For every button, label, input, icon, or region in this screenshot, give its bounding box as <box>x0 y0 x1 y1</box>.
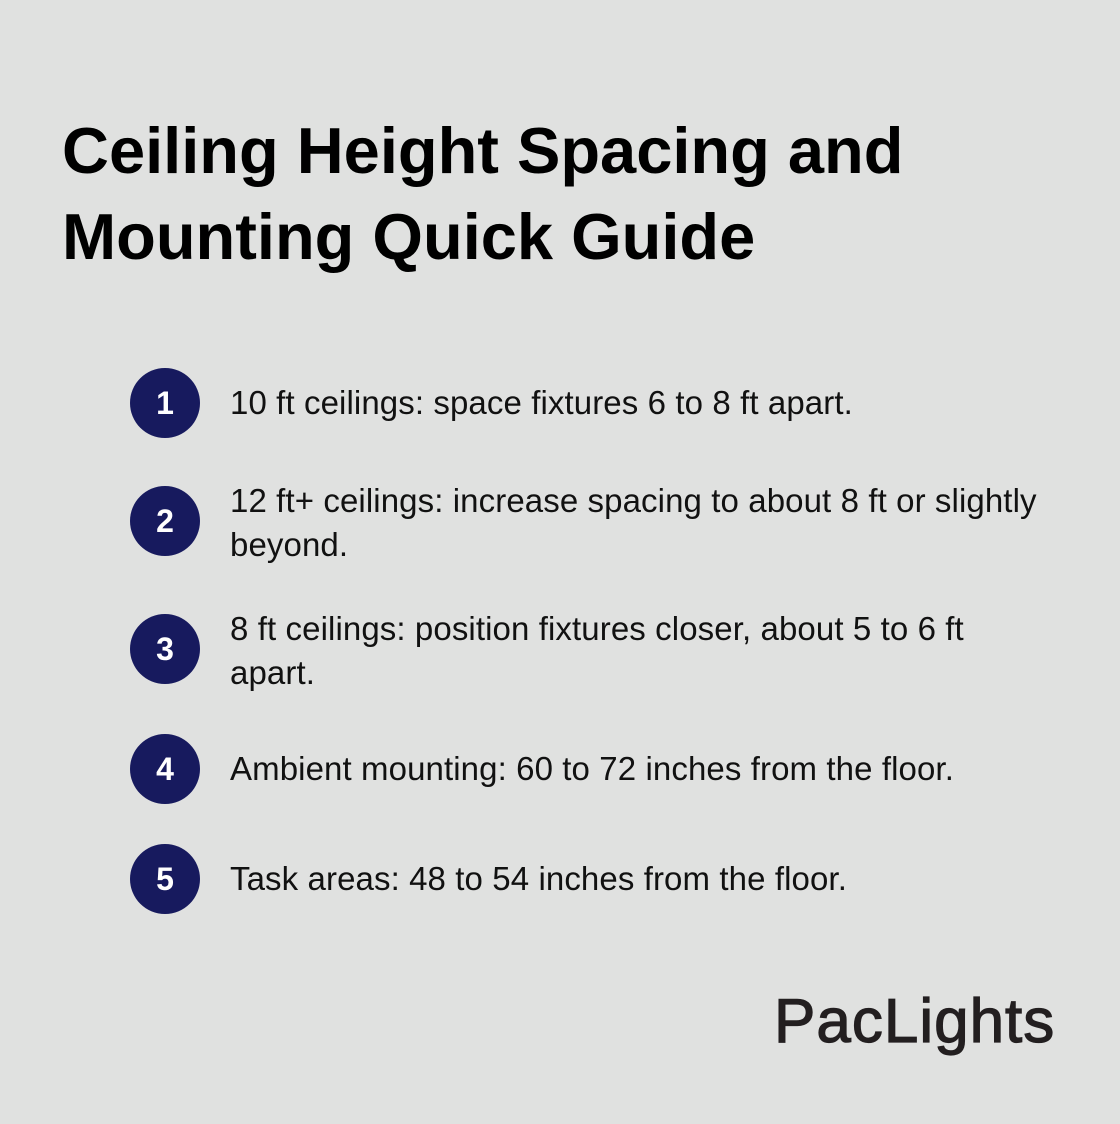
item 3: apart. <box>230 654 315 691</box>
item 2: 2 <box>156 503 174 539</box>
item 2: 12 ft+ ceilings: increase spacing to about 8 ft or slightly beyond. <box>230 482 1037 563</box>
item 1: 10 ft ceilings: space fixtures 6 to 8 ft apart. <box>230 384 853 421</box>
item 4: 4 <box>156 751 174 787</box>
item 5: 5 <box>156 861 174 897</box>
title: Mounting Quick Guide <box>62 200 755 273</box>
item 4: Ambient mounting: 60 to 72 inches from the floor. <box>230 750 954 787</box>
title: Ceiling Height Spacing and <box>62 114 903 187</box>
item 1 <box>130 368 853 438</box>
item 1: 1 <box>156 385 174 421</box>
title <box>62 114 903 273</box>
item 5 <box>130 844 847 914</box>
item 3 <box>130 610 964 691</box>
item 4 <box>130 734 954 804</box>
logo: PacLights <box>774 987 1055 1056</box>
item 3: 8 ft ceilings: position fixtures closer, about 5 to 6 ft <box>230 610 964 647</box>
item 3: 3 <box>156 631 174 667</box>
item 5: Task areas: 48 to 54 inches from the floor. <box>230 860 847 897</box>
